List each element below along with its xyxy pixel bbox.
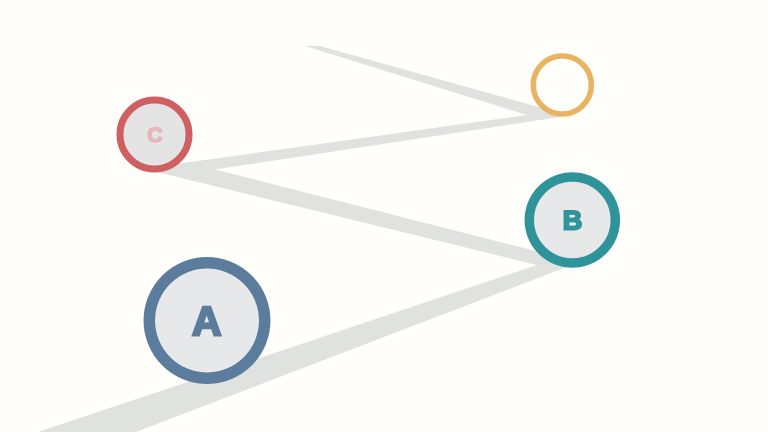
label A: A [192,298,222,344]
node: blank orange circle [533,56,591,114]
zigzag path [38,46,575,432]
label B: B [563,206,582,236]
label C: C [147,124,163,147]
node: C [120,100,189,169]
node: A [149,263,265,378]
node: B [529,177,615,263]
